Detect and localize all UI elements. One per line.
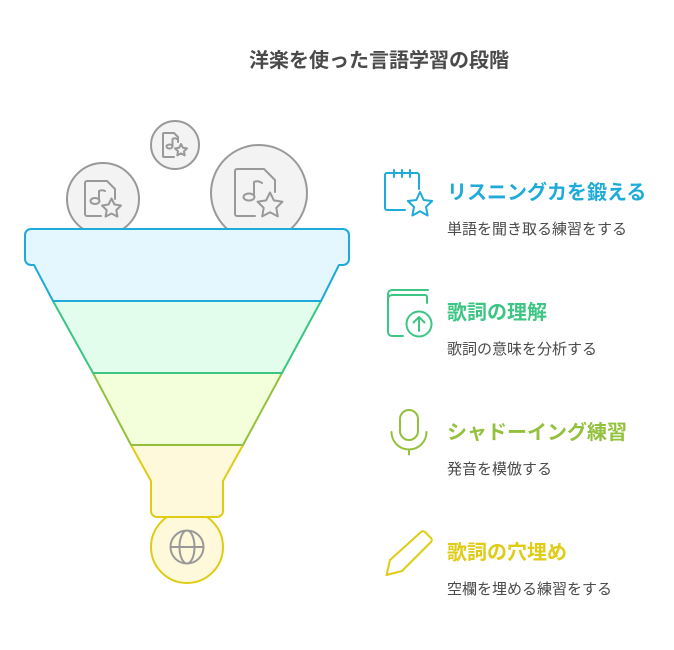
title: 洋楽を使った言語学習の段階 (249, 49, 509, 72)
funnel stage: green (53, 301, 321, 373)
icon: left music file circle (67, 163, 139, 235)
icon: right music file circle (211, 145, 307, 241)
step 1: listening (385, 170, 646, 238)
heading: 歌詞の穴埋め (447, 541, 567, 564)
funnel stage: blue rim (25, 229, 349, 301)
step 4: fill in the blank (386, 531, 612, 598)
description: 歌詞の意味を分析する (447, 341, 597, 358)
icon: calendar star (385, 170, 432, 216)
icon: globe (170, 530, 204, 564)
icon: small music file circle (151, 121, 199, 169)
funnel stage: lime (93, 373, 282, 445)
description: 発音を模倣する (447, 461, 552, 478)
funnel stage: yellow spout (131, 445, 243, 517)
step 2: lyrics comprehension (388, 290, 597, 358)
description: 空欄を埋める練習をする (447, 581, 612, 598)
icon: book with up arrow (388, 290, 432, 336)
description: 単語を聞き取る練習をする (447, 221, 627, 238)
heading: シャドーイング練習 (447, 420, 627, 444)
step 3: shadowing (392, 410, 627, 478)
icon: microphone (392, 410, 426, 454)
heading: 歌詞の理解 (447, 301, 547, 324)
icon: pencil (386, 531, 432, 575)
funnel stage: yellow circle (151, 511, 223, 583)
funnel (25, 229, 349, 583)
heading: リスニングカを鍛える (447, 180, 646, 204)
